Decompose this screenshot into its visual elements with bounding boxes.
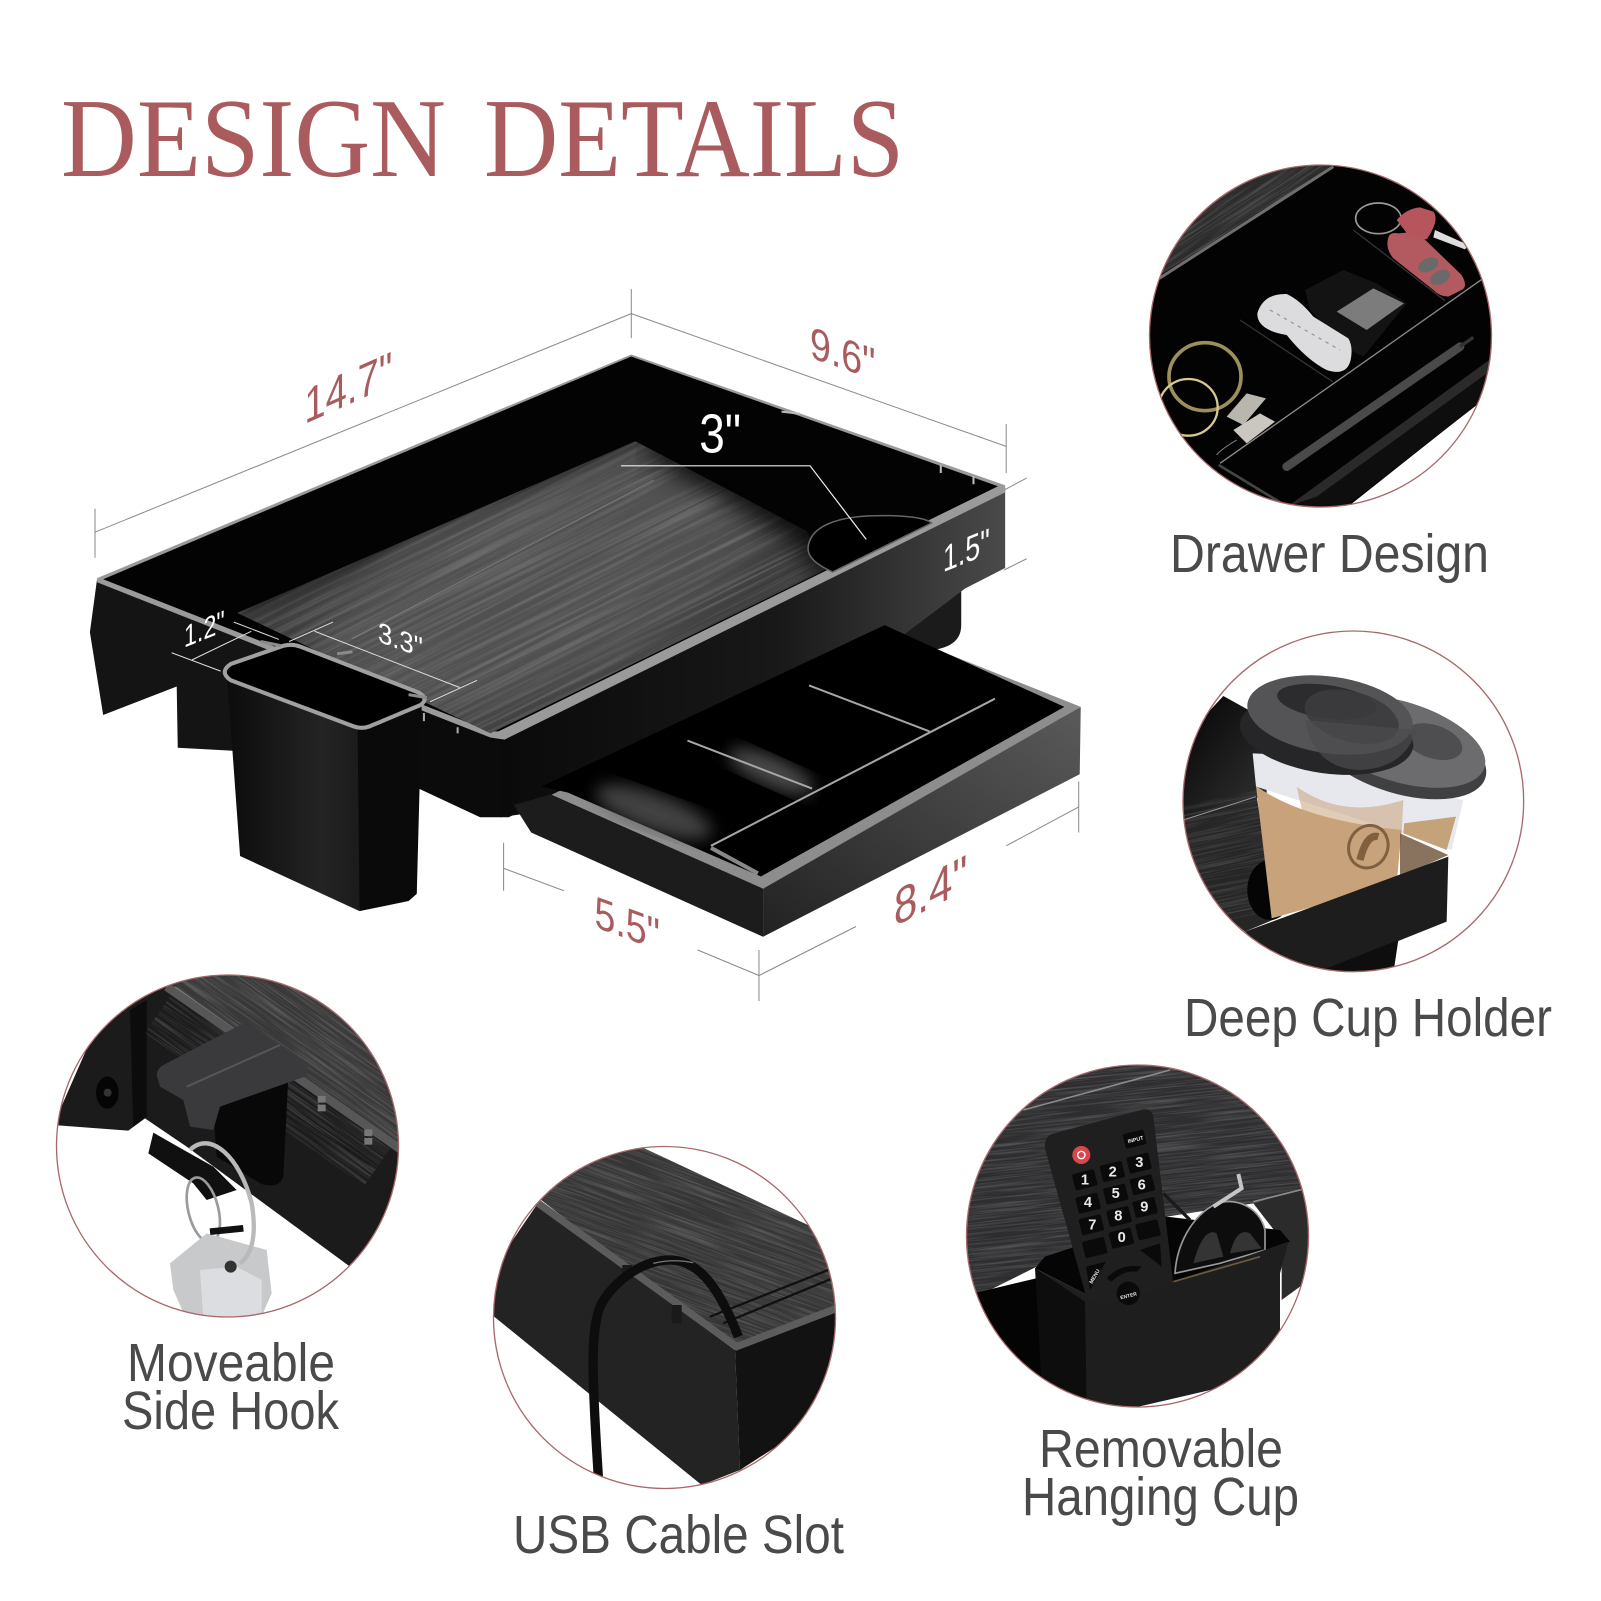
- remote: [1045, 1109, 1173, 1306]
- charger: [1305, 270, 1407, 357]
- label: moveable side hook: [122, 1333, 340, 1441]
- drawer dividers: [687, 685, 995, 846]
- 3 inch label: 3": [699, 403, 741, 465]
- remote key labels: [1081, 1135, 1148, 1301]
- remote key labels: 9: [1140, 1199, 1148, 1215]
- wood top: [537, 1140, 840, 1350]
- detail: drawer design: [1148, 164, 1492, 508]
- 1.5 label: 1.5": [943, 521, 990, 581]
- drawer top rim: [552, 630, 1081, 889]
- remote key labels: INPUT: [1127, 1135, 1145, 1145]
- drawer front band: [1295, 374, 1486, 506]
- 14.7 label: 14.7": [304, 340, 392, 435]
- 3 inch leader: [621, 466, 866, 539]
- label: deep cup holder: Deep Cup Holder: [1184, 988, 1552, 1048]
- cup right face: [358, 700, 422, 911]
- remote keys: [1072, 1129, 1162, 1305]
- clip inner: [213, 1077, 288, 1186]
- upper wall fill: [172, 984, 175, 987]
- rim: [537, 1203, 837, 1347]
- hanging cup: [225, 642, 458, 911]
- detail: removable hanging cup: [930, 1023, 1360, 1460]
- earrings: [1227, 393, 1266, 425]
- remote key labels: MENU: [1089, 1268, 1102, 1285]
- remote key labels: 7: [1088, 1217, 1096, 1233]
- sunglasses: [1163, 1174, 1265, 1273]
- drawer dividers: [1220, 278, 1483, 463]
- tray front wall: [498, 488, 1005, 817]
- detail: moveable side hook: [56, 974, 400, 1318]
- keys: [170, 1233, 272, 1320]
- 8.4 label: 8.4": [894, 843, 967, 938]
- drawer: [514, 625, 1081, 937]
- white annotations: [172, 403, 990, 702]
- title word 2: DETAILS: [484, 77, 904, 201]
- tray wall: [1184, 696, 1267, 819]
- remote key labels: 0: [1118, 1230, 1126, 1246]
- tray rim: [97, 354, 1005, 740]
- wood corner: [1162, 166, 1330, 274]
- key ring front: [190, 1143, 254, 1263]
- main cup white: [1253, 753, 1410, 833]
- holder front wall: [1245, 857, 1448, 973]
- drawer well: [541, 625, 1064, 876]
- detail: deep cup holder: [1182, 630, 1524, 972]
- clips: [627, 1265, 677, 1323]
- tray wall: [53, 987, 407, 1267]
- line 2: Side Hook: [122, 1381, 340, 1441]
- cup left face: [227, 672, 363, 911]
- cup logo: [1347, 824, 1390, 870]
- pen: [1287, 347, 1460, 467]
- key fob: [1387, 232, 1465, 297]
- 9.6 label: 9.6": [810, 317, 875, 390]
- screw: [96, 1077, 119, 1109]
- cup hole: [808, 516, 932, 572]
- 5.5 label: 5.5": [595, 886, 660, 960]
- key ring: [1356, 203, 1401, 234]
- dimension labels red: [304, 317, 967, 960]
- rim highlights: [781, 412, 973, 484]
- holder back wall: [1400, 833, 1448, 877]
- cable: [1257, 294, 1352, 372]
- tray underside: [409, 695, 613, 817]
- wood top: [172, 976, 398, 1142]
- wood floor: [237, 441, 825, 734]
- title word 1: DESIGN: [61, 77, 446, 201]
- holder cylinder: [1327, 940, 1398, 973]
- remote key labels: ENTER: [1120, 1291, 1138, 1301]
- detail: usb cable slot: [480, 1079, 890, 1540]
- lower wall: [960, 1277, 1110, 1413]
- label: drawer design: Drawer Design: [1170, 524, 1489, 584]
- main product with dimensions: [90, 235, 1081, 1001]
- remote key labels: 6: [1138, 1178, 1146, 1194]
- drawer left face: [514, 793, 763, 937]
- front lid: [1240, 710, 1414, 775]
- cup holder cylinder: [899, 587, 961, 650]
- slot clips: [322, 1096, 368, 1147]
- line 2: Hanging Cup: [1022, 1467, 1299, 1527]
- cup rim: [225, 645, 424, 728]
- back cup: [1404, 796, 1464, 850]
- key ring back: [185, 1176, 222, 1239]
- back lid: [1349, 764, 1486, 800]
- power button: [1072, 1146, 1090, 1164]
- bangles: [1169, 343, 1241, 411]
- remote key labels: 3: [1135, 1155, 1143, 1171]
- cup body: [1035, 1242, 1288, 1413]
- label: usb cable slot: USB Cable Slot: [513, 1505, 844, 1565]
- white gap: [1352, 406, 1476, 504]
- hook arm: [148, 1133, 237, 1200]
- main cup sleeve: [1256, 786, 1402, 918]
- clip body: [157, 1023, 308, 1130]
- remote key labels: 8: [1114, 1209, 1122, 1225]
- line 1: Removable: [1039, 1419, 1283, 1479]
- line 1: Moveable: [127, 1333, 335, 1393]
- cable: [593, 1260, 738, 1477]
- remote key labels: 4: [1084, 1195, 1093, 1211]
- drawer right face: [763, 707, 1081, 937]
- tray wood: [1183, 797, 1277, 932]
- wood background: [960, 1060, 1327, 1297]
- side brace: [90, 579, 306, 751]
- label: removable hanging cup: [1022, 1419, 1299, 1527]
- cup hole: [1247, 861, 1282, 920]
- remote key labels: 5: [1112, 1186, 1120, 1202]
- 3.3 label: 3.3": [378, 616, 423, 665]
- dimension lines: [95, 289, 1079, 1001]
- small dimension lines: [172, 622, 477, 702]
- remote key labels: 2: [1109, 1164, 1117, 1180]
- left wall: [490, 1205, 740, 1485]
- remote key labels: 1: [1081, 1172, 1089, 1188]
- cup interior: [1035, 1217, 1290, 1305]
- 1.2 label: 1.2": [184, 603, 225, 654]
- title: [61, 77, 904, 201]
- tray interior: [103, 357, 998, 731]
- right wall: [735, 1310, 838, 1470]
